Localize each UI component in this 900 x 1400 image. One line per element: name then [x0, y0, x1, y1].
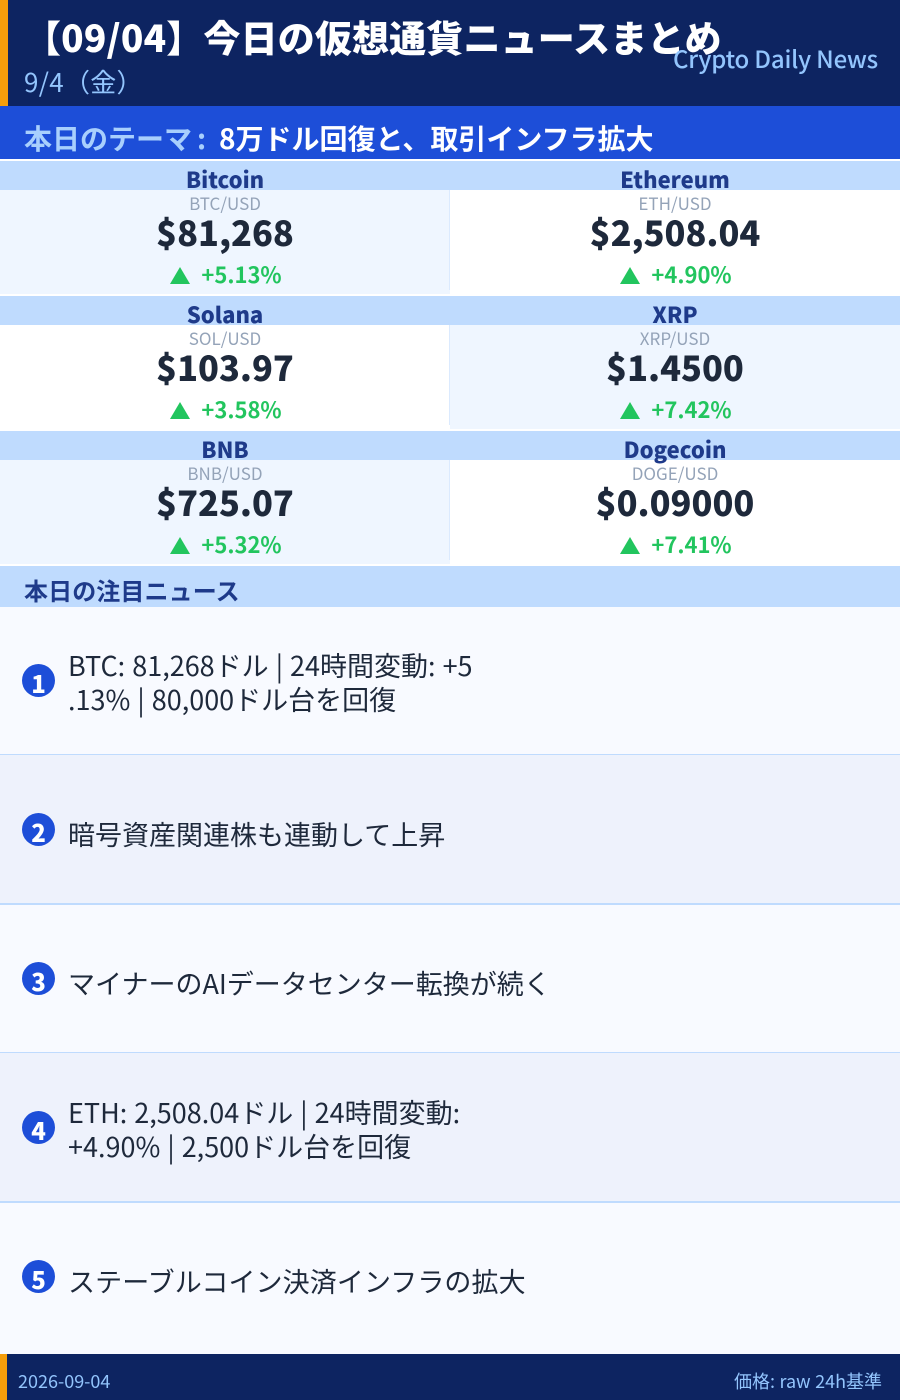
- footer note: 価格: raw 24h基準: [734, 1368, 882, 1394]
- news item 3: [0, 905, 900, 1053]
- number badge: [22, 1260, 55, 1293]
- accent bar: [0, 0, 8, 106]
- card: Ethereum: [450, 161, 900, 294]
- item text: 暗号資産関連株も連動して上昇: [68, 814, 445, 853]
- coin name: BNB: [201, 433, 249, 465]
- item text: ステーブルコイン決済インフラの拡大: [68, 1261, 526, 1300]
- coin name: Bitcoin: [186, 163, 264, 195]
- card: Dogecoin: [450, 431, 900, 564]
- news item 1: [0, 607, 900, 755]
- price: $725.07: [156, 476, 294, 526]
- change: +3.58%: [201, 393, 282, 425]
- news heading: [0, 566, 900, 607]
- pair: ETH/USD: [638, 190, 712, 215]
- name band: [450, 431, 900, 460]
- number badge: 2: [31, 814, 46, 849]
- number badge: [22, 813, 55, 846]
- heading text: 本日の注目ニュース: [24, 572, 240, 607]
- number badge: [22, 962, 55, 995]
- change: +4.90%: [651, 258, 732, 290]
- news item 4: [0, 1053, 900, 1203]
- name band: [0, 161, 450, 190]
- item text: [68, 645, 473, 718]
- item text: ETH: 2,508.04ドル | 24時間変動:: [68, 1092, 460, 1131]
- card: Solana: [0, 296, 450, 429]
- change: +7.42%: [651, 393, 732, 425]
- header: [0, 0, 900, 106]
- coin name: XRP: [652, 298, 698, 330]
- card: Bitcoin: [0, 161, 450, 294]
- card: BNB: [0, 431, 450, 564]
- pair: DOGE/USD: [632, 460, 718, 485]
- card: XRP: [450, 296, 900, 429]
- name band: [0, 296, 450, 325]
- name band: [0, 431, 450, 460]
- item text: BTC: 81,268ドル | 24時間変動: +5: [68, 645, 473, 684]
- item text: マイナーのAIデータセンター転換が続く: [68, 963, 551, 1002]
- number badge: 3: [31, 963, 46, 998]
- theme label: 本日のテーマ:: [24, 118, 206, 158]
- item text: [68, 1092, 460, 1165]
- news item 2: [0, 755, 900, 905]
- price: $0.09000: [596, 476, 754, 526]
- coin name: Ethereum: [620, 163, 730, 195]
- coin name: Dogecoin: [624, 433, 726, 465]
- change: +7.41%: [651, 528, 732, 560]
- price: $2,508.04: [590, 206, 760, 256]
- price: $81,268: [156, 206, 294, 256]
- pair: SOL/USD: [189, 325, 261, 350]
- pair: BNB/USD: [187, 460, 263, 485]
- number badge: 1: [31, 665, 46, 700]
- news item 5: [0, 1203, 900, 1354]
- change: +5.13%: [201, 258, 282, 290]
- brand: Crypto Daily News: [673, 40, 878, 75]
- number badge: 5: [31, 1261, 46, 1296]
- name band: [450, 161, 900, 190]
- item text: .13% | 80,000ドル台を回復: [68, 679, 396, 718]
- pair: BTC/USD: [189, 190, 261, 215]
- footer date: 2026-09-04: [18, 1368, 110, 1394]
- theme banner: [0, 106, 900, 159]
- footer: [0, 1354, 900, 1400]
- price: $103.97: [156, 341, 294, 391]
- price: $1.4500: [606, 341, 744, 391]
- footer accent: [0, 1354, 7, 1400]
- theme text: 8万ドル回復と、取引インフラ拡大: [219, 118, 654, 158]
- number badge: [22, 664, 55, 697]
- title: 【09/04】今日の仮想通貨ニュースまとめ: [24, 9, 722, 63]
- coin name: Solana: [187, 298, 263, 330]
- name band: [450, 296, 900, 325]
- pair: XRP/USD: [640, 325, 710, 350]
- date: 9/4（金）: [24, 63, 143, 100]
- item text: +4.90% | 2,500ドル台を回復: [68, 1126, 411, 1165]
- change: +5.32%: [201, 528, 282, 560]
- number badge: [22, 1111, 55, 1144]
- number badge: 4: [31, 1112, 46, 1147]
